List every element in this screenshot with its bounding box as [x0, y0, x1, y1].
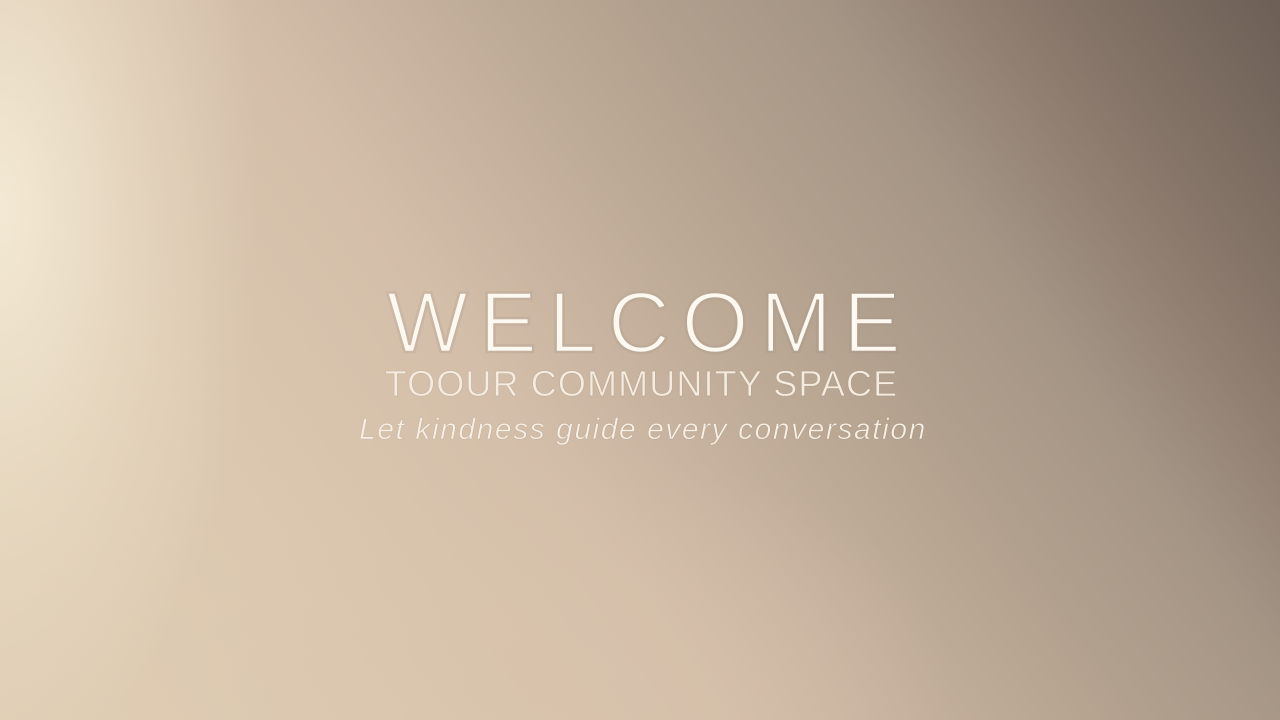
title: WELCOME: [387, 275, 912, 371]
tagline: Let kindness guide every conversation: [359, 413, 927, 446]
subtitle: TOOUR COMMUNITY SPACE: [385, 363, 898, 404]
